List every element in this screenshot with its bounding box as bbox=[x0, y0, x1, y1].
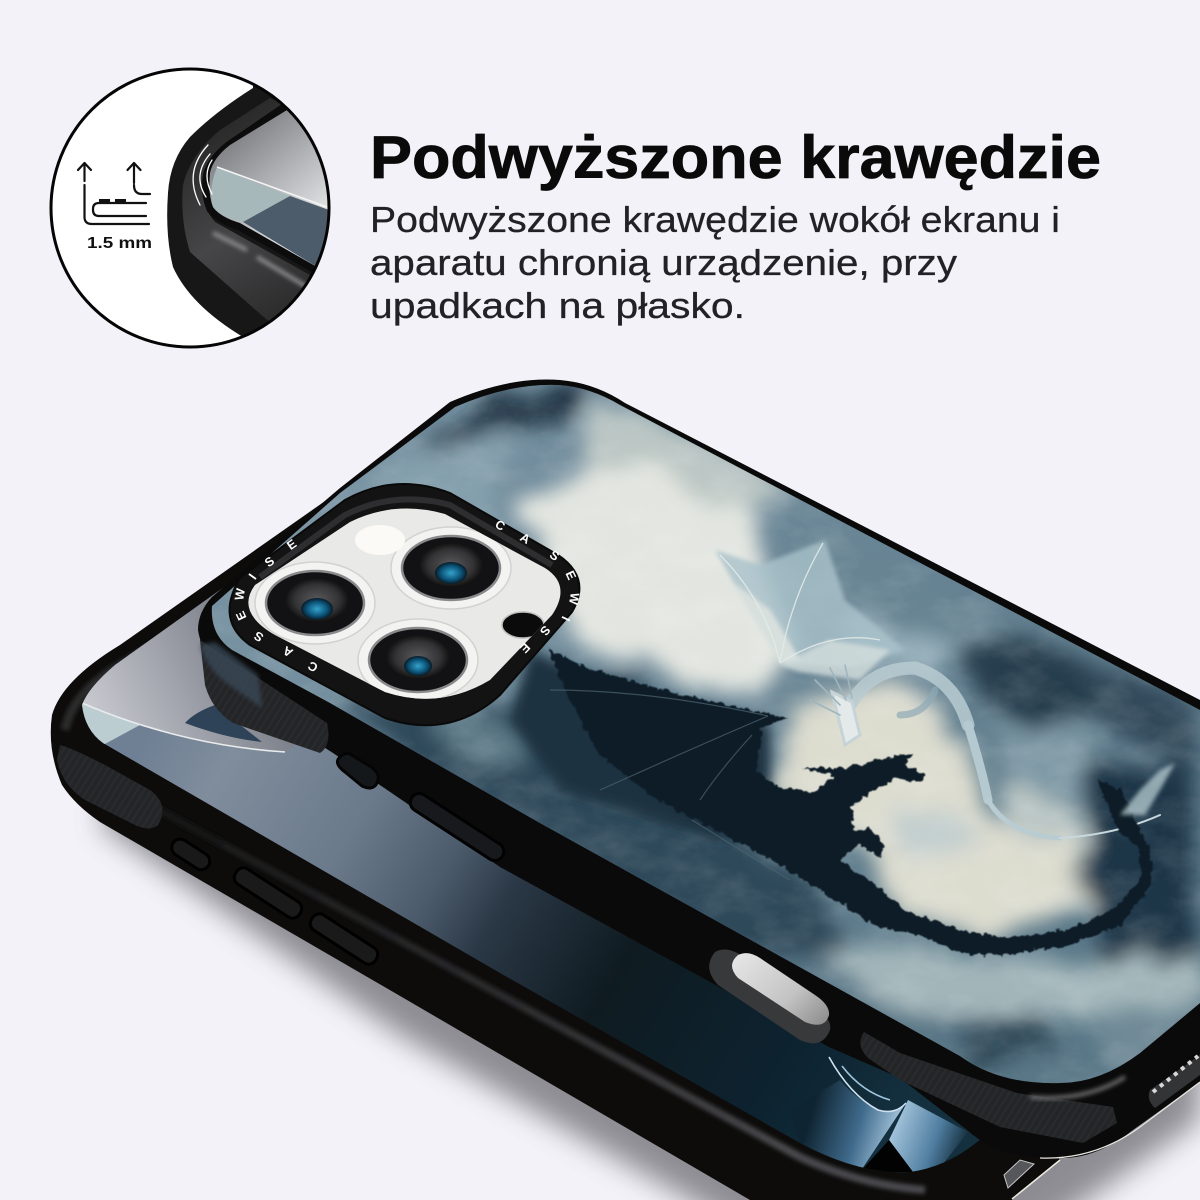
description text: Podwyższone krawędzie wokół ekranu i bbox=[370, 199, 1060, 240]
lens: left bbox=[266, 571, 364, 635]
lower phone screen bbox=[82, 588, 980, 1172]
lower phone corner highlight bbox=[65, 648, 150, 730]
artwork: black dragon wing ribs bbox=[550, 690, 790, 880]
microphone hole bbox=[502, 612, 544, 638]
upper phone speaker grille bbox=[1149, 1055, 1200, 1108]
ring lettering: CASEWISE: E bbox=[233, 609, 249, 622]
upper phone side grip patch bbox=[200, 640, 328, 753]
lower phone bbox=[51, 466, 1060, 1200]
ring lettering: CASEWISE: C bbox=[306, 658, 320, 675]
lens: bottom bbox=[369, 628, 467, 692]
upper phone bbox=[198, 370, 1200, 1158]
camera module bbox=[230, 484, 582, 725]
camera ring bbox=[230, 484, 579, 725]
flash bbox=[355, 525, 405, 555]
floor shadow under phones bbox=[100, 790, 1200, 1200]
artwork: black dragon bbox=[548, 648, 1152, 955]
artwork: tail fin highlight bbox=[1120, 763, 1175, 815]
icon: raised edge height diagram bbox=[78, 163, 150, 224]
artwork: black dragon wing shadow bbox=[510, 650, 770, 840]
camera ring inner bevel bbox=[260, 499, 552, 577]
lower phone power button bbox=[168, 836, 213, 873]
artwork: clouds bbox=[330, 380, 1200, 1080]
lens: top bbox=[402, 536, 500, 600]
description text: aparatu chronią urządzenie, przy bbox=[370, 242, 957, 283]
artwork: dragons in clouds bbox=[200, 370, 1200, 1090]
lower phone bumper bbox=[51, 466, 1060, 1200]
upper phone edge glint bbox=[1040, 1082, 1200, 1158]
artwork: white dragon body bbox=[810, 665, 1160, 838]
ring lettering: CASEWISE: A bbox=[281, 643, 295, 660]
inset: white pressure arcs bbox=[193, 145, 212, 205]
heading: Podwyższone krawędzie bbox=[370, 124, 1101, 191]
ring lettering: CASEWISE: W bbox=[566, 592, 582, 606]
lenses bbox=[255, 525, 544, 701]
ring lettering: CASEWISE: I bbox=[246, 571, 259, 582]
upper phone bottom corner grip bbox=[860, 1032, 1117, 1143]
upper phone grip blue reflection bbox=[200, 642, 262, 708]
ring lettering: CASEWISE: S bbox=[547, 548, 562, 564]
lower phone corner grip patch bbox=[57, 745, 162, 828]
inset: case corner close-up bbox=[167, 86, 328, 336]
ring lettering: CASEWISE: S bbox=[262, 554, 277, 570]
artwork: white dragon wing bbox=[715, 540, 905, 680]
description text: upadkach na płasko. bbox=[370, 285, 745, 326]
silver button housing bbox=[709, 950, 830, 1043]
camera plate bbox=[248, 509, 561, 699]
upper phone corner highlight bbox=[1030, 1077, 1125, 1098]
description text bbox=[370, 199, 1060, 326]
lower phone edge glint bbox=[1012, 1160, 1060, 1199]
silver button bbox=[732, 953, 829, 1025]
ring lettering: CASEWISE bbox=[232, 517, 582, 675]
artwork: cloud wisps bbox=[200, 370, 1200, 1090]
ring lettering: CASEWISE: E bbox=[563, 569, 579, 582]
screen reflection: blue beams bbox=[803, 1080, 904, 1168]
lower phone volume up button bbox=[231, 865, 305, 921]
ring lettering: CASEWISE: E bbox=[284, 537, 299, 553]
ring lettering: CASEWISE: C bbox=[493, 517, 507, 534]
lower phone bumper highlight bbox=[150, 805, 925, 1190]
artwork: white dragon wing ribs bbox=[720, 543, 880, 663]
lower phone volume down button bbox=[307, 911, 381, 967]
ring lettering: CASEWISE: S bbox=[537, 623, 553, 638]
lower phone side port bbox=[1004, 1160, 1034, 1188]
upper phone button bbox=[407, 790, 507, 864]
ring lettering: CASEWISE: A bbox=[518, 530, 532, 547]
label: 1.5 mm: 1.5 mm bbox=[87, 235, 152, 252]
ring lettering: CASEWISE: I bbox=[559, 614, 573, 623]
upper phone side switch bbox=[337, 753, 378, 788]
inset circle: raised edge detail bbox=[51, 69, 340, 360]
ring lettering: CASEWISE: W bbox=[232, 587, 248, 601]
ring lettering: CASEWISE: S bbox=[252, 628, 266, 645]
upper phone bumper bbox=[198, 379, 1200, 1158]
ring lettering: CASEWISE: E bbox=[517, 640, 533, 656]
